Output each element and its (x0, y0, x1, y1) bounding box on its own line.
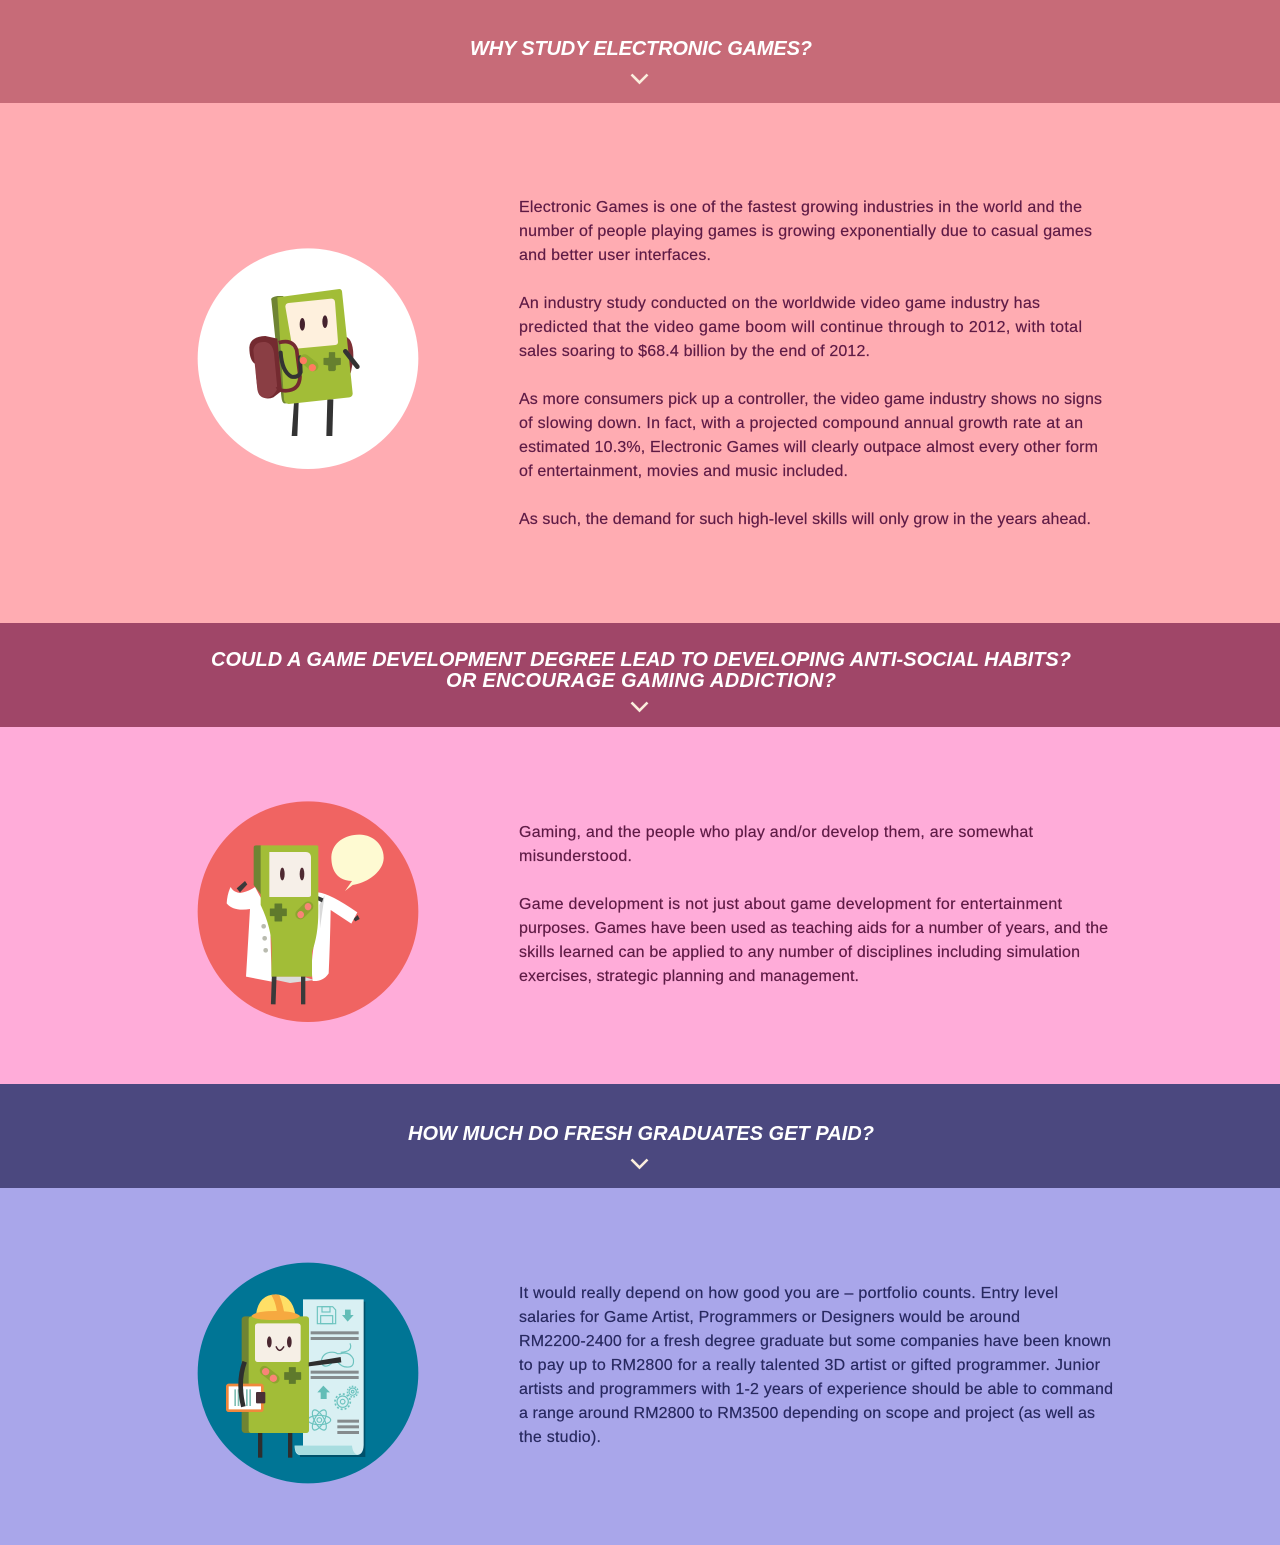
icon: chevron down (630, 702, 648, 712)
text: why study paragraphs: An industry study conducted on the worldwide video game industry has (519, 295, 1040, 312)
icon: chevron down (630, 1158, 648, 1170)
text: anti-social paragraphs: exercises, strategic planning and management. (519, 968, 859, 985)
text: why study paragraphs: sales soaring to $68.4 billion by the end of 2012. (519, 343, 870, 360)
text: anti-social paragraphs: Game development is not just about game development for entertainment (519, 896, 1063, 913)
text: anti-social paragraphs: skills learned can be applied to any number of disciplines including simulation (519, 944, 1080, 961)
text: why study paragraphs: As such, the demand for such high-level skills will only grow in the years ahead. (519, 511, 1091, 528)
icon: lab coat console character (198, 801, 418, 1022)
text: graduate pay paragraph: the studio). (519, 1429, 601, 1446)
icon: chevron down (630, 74, 648, 84)
heading: graduate pay question: HOW MUCH DO FRESH GRADUATES GET PAID? (408, 1123, 874, 1145)
panel: why study header band (0, 0, 1280, 103)
panel: why study body (0, 103, 1280, 623)
icon: backpack console character (198, 248, 418, 469)
text: why study paragraphs (519, 199, 1102, 528)
panel: graduate pay header band (0, 1084, 1280, 1188)
text: anti-social paragraphs (519, 824, 1108, 985)
text: graduate pay paragraph: It would really depend on how good you are – portfolio counts. Entry level (519, 1285, 1058, 1302)
text: why study paragraphs: of slowing down. In fact, with a projected compound annual growth rate at an (519, 415, 1083, 432)
text: why study paragraphs: and better user interfaces. (519, 247, 711, 264)
text: graduate pay paragraph: to pay up to RM2800 for a really talented 3D artist or gifted programmer. Junior (519, 1357, 1101, 1374)
panel: graduate pay body (0, 1188, 1280, 1545)
text: graduate pay paragraph: artists and programmers with 1-2 years of experience should be able to command (519, 1381, 1113, 1398)
text: why study paragraphs: number of people playing games is growing exponentially due to casual games (519, 223, 1092, 240)
text: graduate pay paragraph: salaries for Game Artist, Programmers or Designers would be around (519, 1309, 1020, 1326)
heading: anti-social habits question (211, 649, 1071, 692)
icon: hard hat console character with blueprint (198, 1262, 418, 1484)
text: anti-social paragraphs: Gaming, and the people who play and/or develop them, are somewhat (519, 824, 1034, 841)
text: graduate pay paragraph: RM2200-2400 for a fresh degree graduate but some companies have been known (519, 1333, 1111, 1350)
text: why study paragraphs: of entertainment, movies and music included. (519, 463, 848, 480)
text: why study paragraphs: As more consumers pick up a controller, the video game industry shows no signs (519, 391, 1102, 408)
panel: anti-social habits header band (0, 623, 1280, 727)
text: anti-social paragraphs: purposes. Games have been used as teaching aids for a number of years, and the (519, 920, 1108, 937)
panel: anti-social habits body (0, 727, 1280, 1084)
heading: why study electronic games: WHY STUDY ELECTRONIC GAMES? (470, 38, 812, 60)
text: why study paragraphs: predicted that the video game boom will continue through to 2012, with total (519, 319, 1082, 336)
text: graduate pay paragraph (519, 1285, 1113, 1446)
text: why study paragraphs: estimated 10.3%, Electronic Games will clearly outpace almost every other form (519, 439, 1098, 456)
heading: anti-social habits question: OR ENCOURAGE GAMING ADDICTION? (446, 670, 836, 692)
text: anti-social paragraphs: misunderstood. (519, 848, 632, 865)
heading: anti-social habits question: COULD A GAME DEVELOPMENT DEGREE LEAD TO DEVELOPING ANTI-SOCIAL HABITS? (211, 649, 1071, 671)
text: why study paragraphs: Electronic Games is one of the fastest growing industries in the world and the (519, 199, 1082, 216)
text: graduate pay paragraph: a range around RM2800 to RM3500 depending on scope and project (as well as (519, 1405, 1095, 1422)
